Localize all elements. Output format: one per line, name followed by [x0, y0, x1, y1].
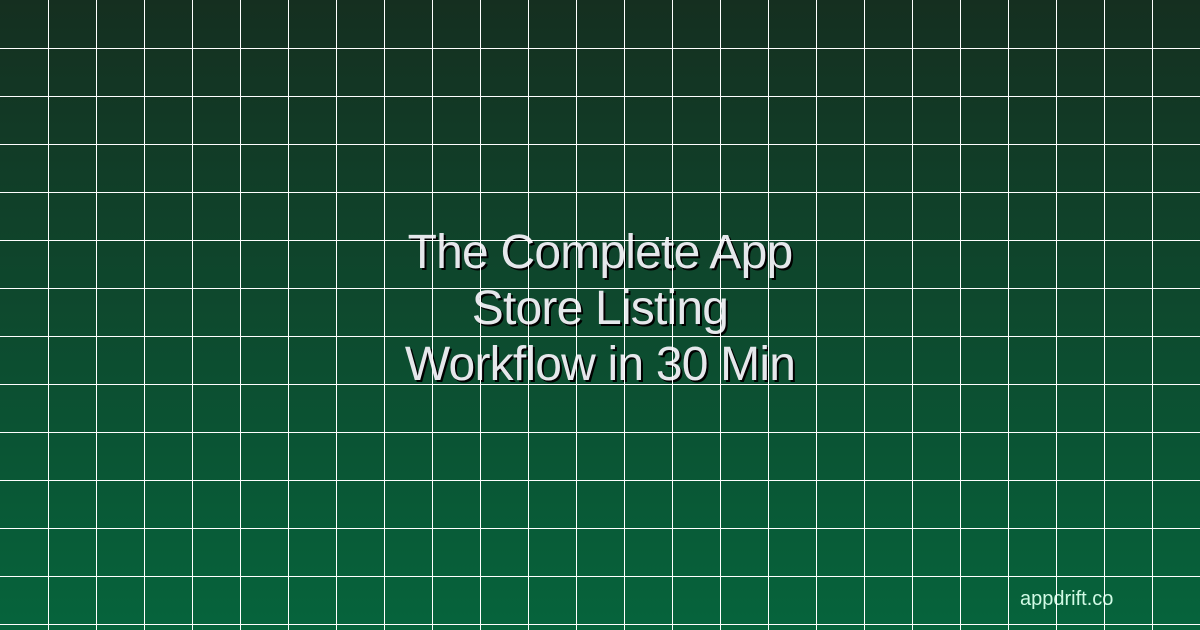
site name: appdrift.co	[1020, 588, 1113, 610]
title: Store Listing	[472, 282, 728, 335]
title: The Complete App	[408, 226, 792, 279]
title: Workflow in 30 Min	[405, 338, 795, 391]
title	[405, 226, 795, 391]
